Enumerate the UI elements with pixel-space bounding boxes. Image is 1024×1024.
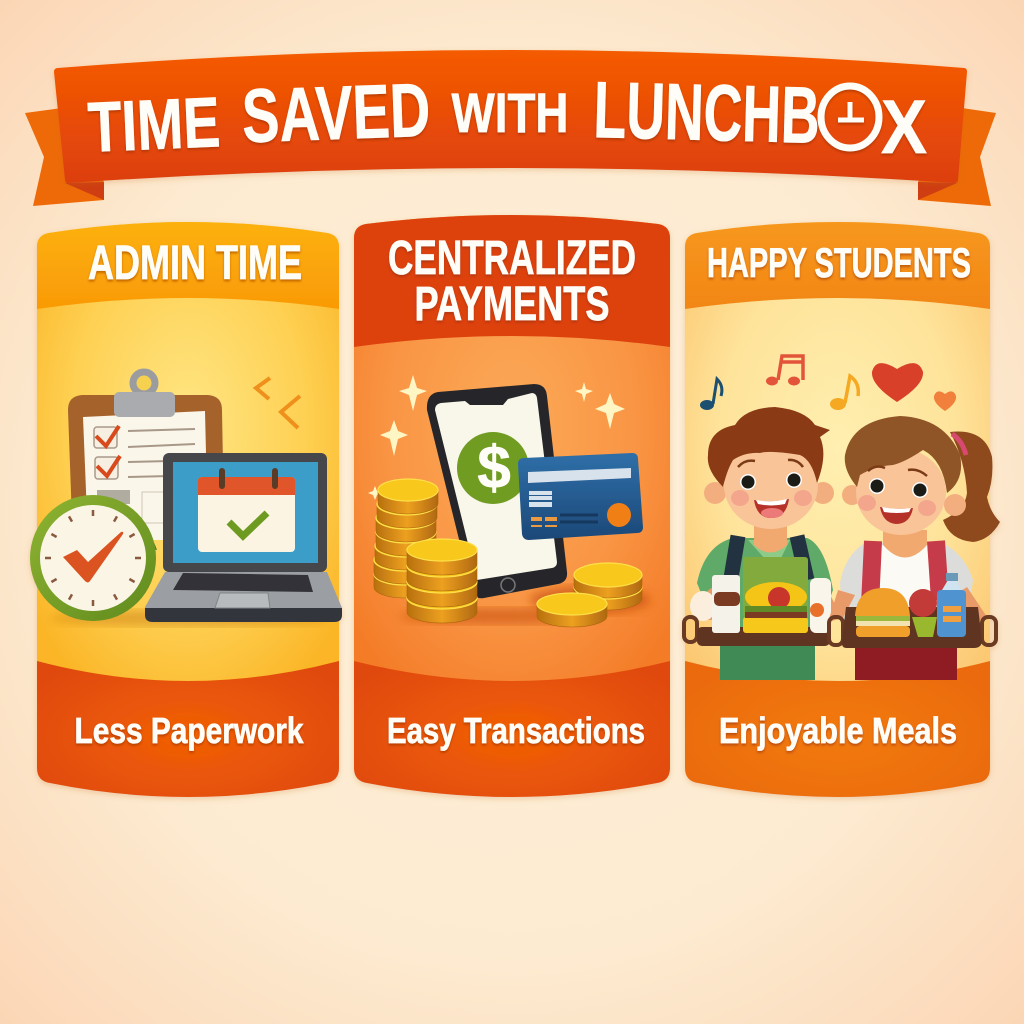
title: SAVED: [241, 68, 432, 159]
heading: centralized payments: PAYMENTS: [414, 278, 610, 331]
panel: admin time: [30, 210, 342, 810]
boy hair: [708, 407, 830, 487]
icon: front coin stack: [407, 539, 477, 623]
panel footer: [354, 661, 670, 810]
ribbon right tail: [918, 108, 996, 206]
banner: [25, 50, 996, 206]
title: [86, 65, 927, 170]
title: WITH: [452, 81, 568, 144]
heading: centralized payments: CENTRALIZED: [388, 232, 636, 285]
caption: enjoyable meals: Enjoyable Meals: [719, 710, 957, 751]
icon: credit card: [518, 453, 643, 540]
icon: clock: [30, 495, 157, 621]
panel: happy students: [684, 210, 1000, 810]
icon: back coin stack: [374, 479, 438, 598]
icon: boy's tray: [684, 557, 838, 646]
title: TIME: [86, 83, 222, 168]
ribbon body: [54, 50, 967, 183]
dollar sign: $: [477, 434, 511, 501]
heading: admin time: ADMIN TIME: [88, 237, 302, 290]
ribbon left tail: [25, 108, 104, 206]
panel footer: [37, 661, 339, 810]
panel header: [354, 215, 670, 347]
panel: centralized payments: [354, 200, 670, 810]
icon: sparks: [256, 378, 300, 428]
girl hair: [845, 416, 961, 493]
caption: easy transactions: Easy Transactions: [387, 710, 645, 751]
clock O in logo: [821, 86, 879, 148]
panel footer: [685, 661, 990, 810]
title: X: [881, 85, 927, 170]
girl ponytail: [943, 432, 1000, 542]
caption: less paperwork: Less Paperwork: [74, 710, 304, 751]
panel header: [37, 222, 339, 309]
heading: centralized payments: [388, 232, 636, 331]
boy: [697, 407, 834, 680]
icon: phone: [427, 384, 567, 598]
icon: music notes and hearts: [700, 356, 956, 411]
icon: sparkles: [368, 375, 625, 500]
panel header: [685, 222, 990, 309]
title: LUNCHB: [593, 65, 821, 160]
icon: right coin stack: [537, 563, 642, 627]
girl: [840, 416, 1000, 680]
icon: clipboard: [68, 372, 224, 540]
icon: girl's tray: [828, 573, 996, 648]
icon: laptop: [145, 453, 342, 622]
